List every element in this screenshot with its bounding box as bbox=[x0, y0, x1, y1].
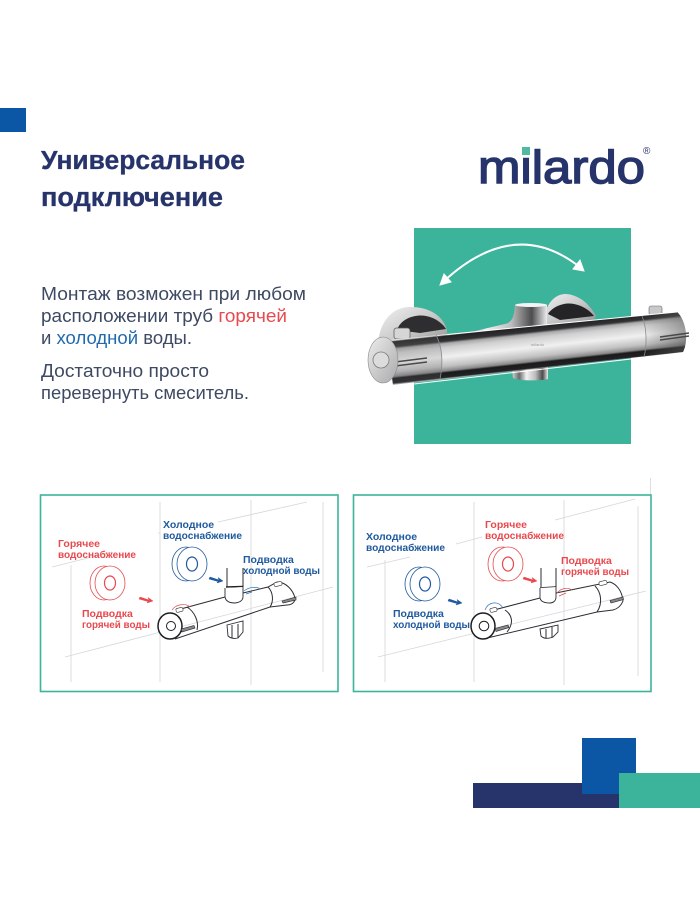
panel: left diagram: водоснабжение bbox=[58, 549, 136, 561]
panel: right diagram: горячей воды bbox=[561, 566, 629, 578]
wall grid bbox=[52, 500, 333, 685]
description text: перевернуть смеситель. bbox=[41, 383, 249, 403]
left section shade bbox=[387, 335, 442, 385]
title bbox=[41, 147, 245, 212]
arrow: rotation bbox=[440, 245, 584, 285]
panel: right diagram bbox=[354, 478, 651, 692]
top connector bbox=[445, 305, 547, 338]
arrow: hot bbox=[523, 577, 537, 583]
top nubs bbox=[394, 328, 410, 339]
label: hot inlet: Подводка bbox=[561, 555, 612, 567]
label: cold supply: Холодное bbox=[163, 519, 214, 531]
label: hot inlet: Подводка bbox=[82, 608, 133, 620]
white edge lines bbox=[447, 312, 677, 334]
main cylinder bbox=[387, 312, 686, 385]
mixer line drawing bbox=[471, 568, 624, 639]
title: Универсальное bbox=[41, 147, 245, 175]
description text: и холодной воды. bbox=[41, 328, 192, 348]
title: подключение bbox=[41, 184, 223, 212]
panel: left diagram: горячей воды bbox=[82, 619, 150, 631]
logo: milardo: ® bbox=[643, 146, 651, 157]
icon: hot ring bbox=[488, 547, 523, 581]
tiny brand mark: milardo bbox=[531, 342, 545, 347]
label: cold inlet: Подводка bbox=[393, 608, 444, 620]
wall plate left bbox=[378, 307, 447, 350]
side slots bbox=[395, 358, 427, 366]
description text: расположении труб горячей bbox=[41, 306, 287, 326]
mixer line drawing bbox=[158, 568, 296, 639]
end cap bbox=[368, 337, 398, 383]
seams bbox=[436, 335, 442, 379]
panel: left diagram: холодной воды bbox=[243, 565, 320, 577]
arrow: cold bbox=[209, 577, 223, 583]
panel: left diagram: водоснабжение bbox=[163, 530, 242, 542]
teal background square bbox=[414, 228, 631, 444]
description text: Монтаж возможен при любом bbox=[41, 284, 306, 304]
photo: chrome thermostatic mixer bbox=[368, 294, 689, 385]
panel border bbox=[354, 495, 651, 692]
label: hot supply: Горячее bbox=[58, 538, 100, 550]
label: hot supply: Горячее bbox=[485, 519, 527, 531]
right section shade bbox=[642, 312, 686, 357]
label: cold inlet: Подводка bbox=[243, 554, 294, 566]
label: cold supply: Холодное bbox=[366, 531, 417, 543]
panel: left diagram bbox=[40, 495, 338, 692]
arrow: cold bbox=[448, 599, 462, 605]
wall plate right bbox=[543, 294, 596, 325]
panel border bbox=[40, 495, 338, 692]
wall grid bbox=[367, 499, 646, 685]
panel: right diagram: водоснабжение bbox=[366, 542, 445, 554]
faint tile line above panel bbox=[650, 478, 652, 495]
icon: hot ring bbox=[90, 566, 125, 600]
decorative corner blocks bbox=[473, 738, 700, 808]
arrow: hot bbox=[139, 597, 153, 603]
bottom nut bbox=[512, 364, 548, 380]
panel: right diagram: холодной воды bbox=[393, 619, 470, 631]
description text bbox=[41, 284, 306, 403]
logo: milardo: milardo bbox=[478, 141, 645, 193]
panel: right diagram: водоснабжение bbox=[485, 530, 564, 542]
corner accent square bbox=[0, 108, 26, 132]
icon: cold ring bbox=[405, 567, 440, 601]
description text: Достаточно просто bbox=[41, 361, 209, 381]
icon: cold ring bbox=[172, 547, 207, 581]
